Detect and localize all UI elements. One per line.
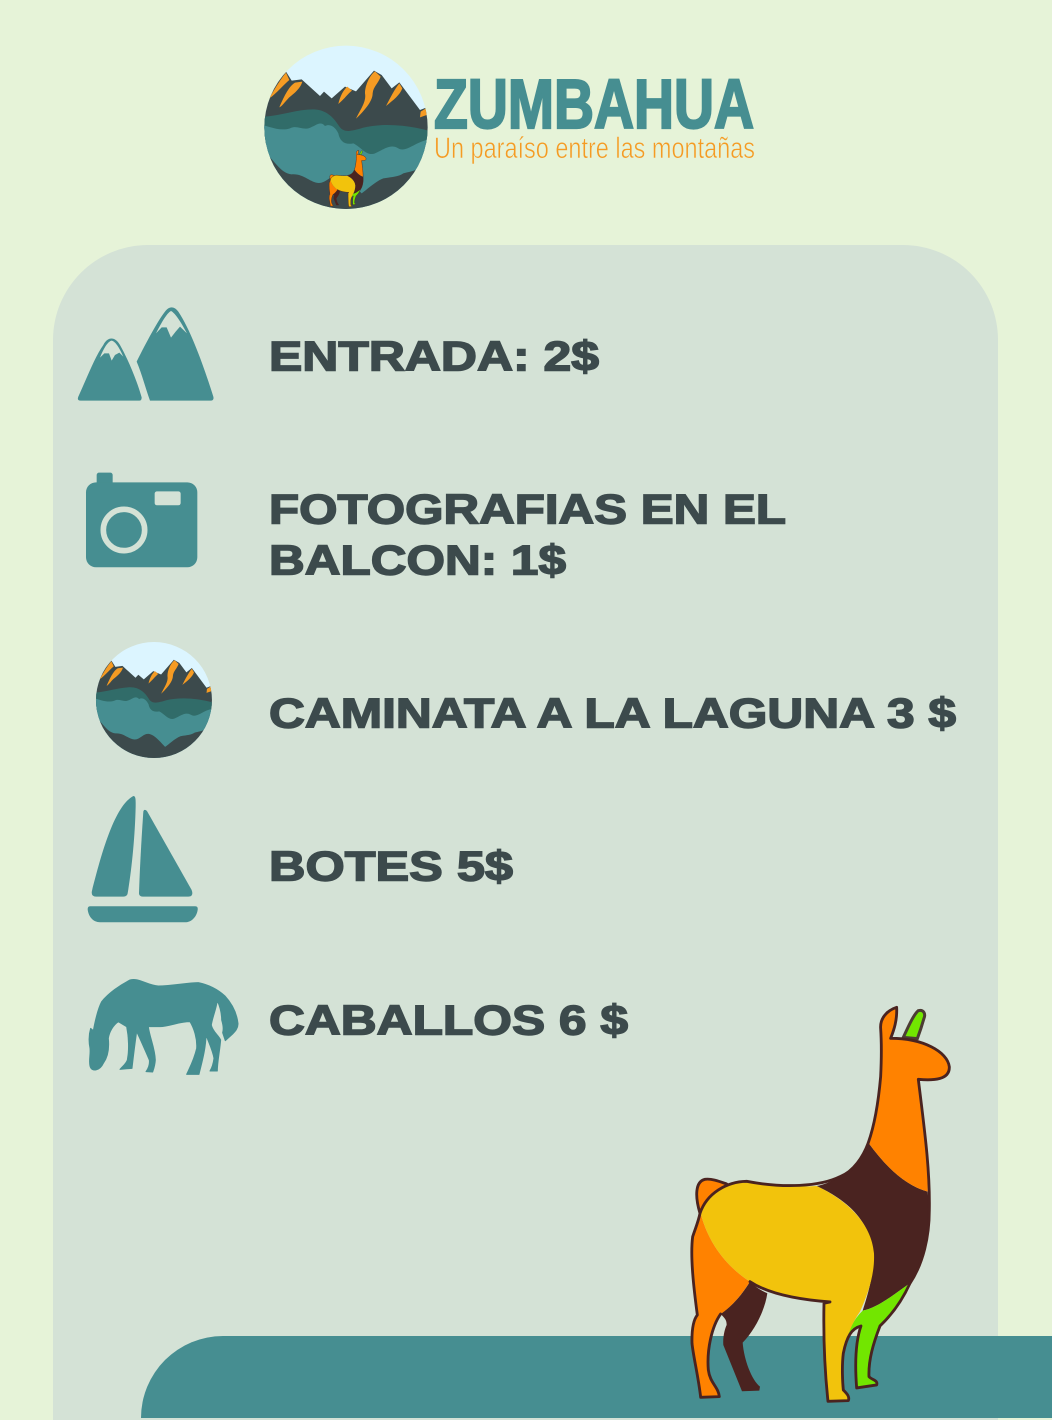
logo [260,46,755,217]
icon: lagoon badge [93,642,215,763]
horses price: CABALLOS 6 $ [269,996,628,1044]
logo tagline: Un paraíso entre las montañas [434,132,755,165]
hike price: CAMINATA A LA LAGUNA 3 $ [269,690,956,736]
boats price: BOTES 5$ [269,842,513,890]
ground band [141,1336,1052,1418]
logo badge: mountains, lagoon and llama [260,46,432,217]
entry price: ENTRADA: 2$ [269,332,599,380]
llama illustration [692,1007,949,1401]
photography price [269,486,786,584]
panel: price list [53,245,998,1420]
icon: mountains [78,307,214,401]
photography price: BALCON: 1$ [269,536,566,584]
logo title: ZUMBAHUA [434,65,754,143]
icon: camera [86,473,197,567]
icon: sailboat [88,796,198,922]
icon: horse [89,979,238,1074]
photography price: FOTOGRAFIAS EN EL [269,486,786,532]
